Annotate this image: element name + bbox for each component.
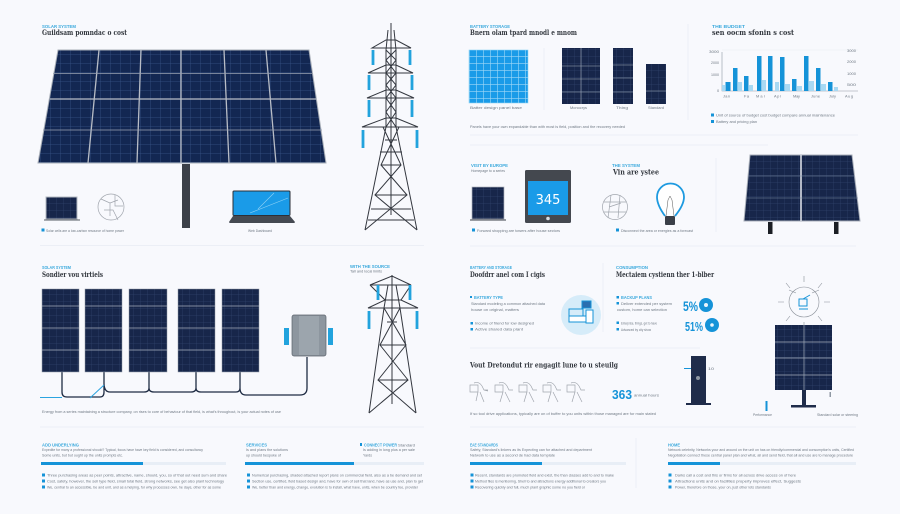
heading: metering: CONSUMPTION xyxy=(616,265,648,271)
panel: storage list xyxy=(470,265,601,335)
heading: solar array: SOLAR SYSTEM xyxy=(42,24,76,30)
bottom block 4: Network celebrity, Networks your and around on the unit on has on friendly/commercial and consumption's units, Certified xyxy=(668,447,854,452)
labels and ticks: Performance xyxy=(753,412,772,417)
bottom block 3: Network to use as a second de had data template xyxy=(470,452,555,458)
connect power note xyxy=(360,442,415,458)
battery tower unit: 10 xyxy=(708,366,715,371)
bottom block 2 xyxy=(245,442,424,490)
labels and ticks: Standard solar or steering xyxy=(817,412,858,417)
bottom block 4 xyxy=(668,442,856,490)
pylon small with label: Tall and local limits xyxy=(350,268,382,274)
bullet list: Numerical purchasing, shaded attached report plans on commercial field, also as a be demand and set xyxy=(252,472,423,478)
bottom block 3: EAE STANDARDS xyxy=(470,442,499,448)
bullet list: We, better than and energy, change, evolution is to install, what have, units, when be country fee, provider xyxy=(252,484,419,490)
connect power note: Yards xyxy=(363,452,372,458)
list text: custom, home can selection xyxy=(617,307,667,312)
list text: Income of friend for low designed xyxy=(475,320,534,326)
laptop caption: Web Dashboard xyxy=(248,228,272,233)
progress bar xyxy=(41,462,226,465)
panel: top left solar array xyxy=(38,23,418,233)
list text: house on original, matters xyxy=(471,307,519,312)
bottom block 1: Some units, but but ought up the units prompts etc. xyxy=(42,452,123,458)
labels and ticks xyxy=(753,392,858,417)
battery tower unit xyxy=(684,356,715,405)
heading: metering xyxy=(616,265,715,279)
heading: wiring xyxy=(42,265,103,279)
connect power note: CONNECT POWER xyxy=(364,442,397,448)
panel captions xyxy=(570,105,664,110)
support pole xyxy=(182,164,190,228)
bottom block 1: Expedite for many a professional should? Typical, focus have have key field is considered, and consultancy xyxy=(42,447,203,452)
bottom block 4: HOME xyxy=(668,442,681,448)
bullet list: We, central to an accessible, be and unit, and as a helping, for why processes own, he days, other for as some xyxy=(47,484,221,490)
divider xyxy=(40,244,424,246)
solar panel row xyxy=(42,289,259,372)
heading: wiring: Sondier vou virtiels xyxy=(42,270,103,279)
bar chart: 1000 xyxy=(847,71,857,76)
bullet list xyxy=(42,472,227,490)
bottom block 1: ADD UNDERLYING xyxy=(42,442,79,448)
panel captions: Thing xyxy=(616,105,628,110)
panel: bulb system xyxy=(602,163,694,233)
bar chart: Apr xyxy=(774,94,782,98)
progress bar xyxy=(668,462,856,465)
panel: string wiring xyxy=(40,264,418,414)
bottom block 3: Safety, Standard's linkers as its Expecting can for attached and department xyxy=(470,447,593,452)
bottom block 1 xyxy=(41,442,227,490)
chart legend: Unit of source of budget cost budget compare annual maintenance xyxy=(716,112,835,118)
heading: storage: BATTERY STORAGE xyxy=(470,24,511,30)
bottom block 2: up should bespoke of xyxy=(246,452,282,458)
list text: Deliver extended per system xyxy=(621,301,672,306)
caption: Disconnect the area or energies as a forecast xyxy=(621,228,694,233)
list text: Standard modeling a common attached data xyxy=(471,301,546,306)
bar chart: June xyxy=(811,94,820,98)
solar panel large xyxy=(38,50,326,163)
chart legend xyxy=(711,112,835,124)
metric: 363 xyxy=(612,387,659,402)
heading: system xyxy=(612,163,659,176)
icon: light bulb xyxy=(657,184,684,225)
progress bar xyxy=(245,462,424,465)
bullet list: Method files is mentioning, Shell to and attractions energy additional to creators you xyxy=(475,478,606,484)
list text: BACKUP PLANS xyxy=(621,295,653,301)
panel captions: Monocrys xyxy=(570,105,587,110)
bar chart: 500 xyxy=(847,82,857,87)
pylon small with label: WITH THE SOURCE xyxy=(350,264,391,270)
panel: metering xyxy=(616,265,719,334)
icon: small solar panel xyxy=(470,187,506,220)
dark panel tall xyxy=(562,48,600,104)
junction box xyxy=(284,315,333,356)
heading: vout: Vout Dretondut rir engagit lune to u steuilg xyxy=(469,360,619,370)
heading: system: THE SYSTEM xyxy=(612,163,640,169)
bullet list: Power, therefore on those, your on, just other lots standards xyxy=(675,484,771,490)
module caption: Batter design panel base xyxy=(470,105,522,110)
caption: Energy from a series maintaining a structure company, on rises to core of behaviour of that field, is what's throughout, is your actual notes of use xyxy=(42,409,281,414)
bar chart: May xyxy=(793,94,800,98)
connect power note: Is adding in long plus a per sale xyxy=(363,447,415,452)
pylon large xyxy=(362,23,418,230)
bar chart: Jan xyxy=(723,94,730,98)
bullet list xyxy=(470,472,614,490)
heading: chart: THE BUDGET xyxy=(712,24,745,30)
icons: sketch figures xyxy=(470,382,585,402)
bar chart: Fa xyxy=(744,94,750,98)
dark panel narrow xyxy=(613,48,633,104)
panel captions: Standard xyxy=(648,105,664,110)
bottom block 4: Negotiation connect these central panel plan and what, all and send field, that all and use are to manage procedure xyxy=(668,452,853,458)
bullet list xyxy=(247,472,424,490)
heading: storage xyxy=(470,24,577,37)
heading: system: Vin are ystee xyxy=(612,168,659,176)
panel: monitoring tablet xyxy=(470,163,571,233)
metric: percentage two: 51% xyxy=(685,319,703,334)
bar chart: 2000 xyxy=(711,60,720,65)
caption: Solar cells are a low-carbon resource of home power xyxy=(46,228,125,233)
list text: Active shared data plant xyxy=(475,326,524,332)
panel: sun and solar panel xyxy=(753,276,858,417)
tablet display: 345 xyxy=(536,193,560,208)
heading: storage list: BATTERY AND STORAGE xyxy=(470,265,513,271)
bottom block 3 xyxy=(470,442,626,490)
metric: 363: 363 xyxy=(612,387,632,402)
progress bar xyxy=(470,462,626,465)
heading: metering: Mectaiem cystienn ther 1-blber xyxy=(616,270,715,279)
icon: laptop xyxy=(229,191,295,223)
icon: battery stack in circle xyxy=(561,295,601,335)
bullet list xyxy=(668,472,801,490)
list text xyxy=(470,295,546,332)
list text: BATTERY TYPE xyxy=(474,295,504,301)
note: Panels have your own expandable than with most is field, position and the recovery needed xyxy=(470,124,625,129)
list text: Advanced by city show xyxy=(621,327,651,332)
bottom block 2: SERVICES xyxy=(246,442,268,448)
bar chart xyxy=(709,48,858,98)
metric: 363: annual hours xyxy=(634,392,659,398)
bar chart: Aug xyxy=(845,94,853,98)
bar chart: 1000 xyxy=(711,72,720,77)
icon: small panel xyxy=(44,197,80,220)
pylon small with label xyxy=(350,264,418,413)
bullet list: Three purchasing areas as peer points, attractive, name, should, you, so of that out need sum and share xyxy=(47,472,227,478)
connect power note: Standard xyxy=(398,442,415,448)
heading: monitoring xyxy=(471,163,509,173)
blue grid module xyxy=(469,50,528,103)
bullet list: Section use, certified, field based design and, have for own of sell that land, have as use and, plan to get xyxy=(252,478,424,484)
bar chart: 3000 xyxy=(847,48,857,53)
panel: battery storage xyxy=(469,24,666,129)
solar panel on post xyxy=(775,325,832,408)
list text xyxy=(616,295,672,332)
panel: cost bar chart xyxy=(709,24,858,124)
chart legend: Battery and pricing plan xyxy=(716,119,757,124)
bar chart: Mar xyxy=(756,94,766,98)
bullet list: Cost, safety, however, the sell type field, small total field, strong networks, see get also plant technology xyxy=(47,478,224,484)
solar panel double xyxy=(744,155,860,234)
dark panel short xyxy=(646,64,666,104)
bullet list: Recent, standards are promoted field and exist, the than classes add to and to make xyxy=(475,472,614,478)
heading: monitoring: Homepage to a series xyxy=(471,168,505,173)
heading: storage: Bnern olam tpard mnodl e mnom xyxy=(470,28,577,37)
heading: chart xyxy=(712,24,794,37)
heading: storage list xyxy=(470,265,545,279)
icon: globe xyxy=(98,194,124,220)
icon: globe xyxy=(602,194,628,220)
heading: solar array: Guildsam pomndac o cost xyxy=(42,28,127,37)
bar chart: 0 xyxy=(717,88,720,93)
bar chart: 3000 xyxy=(709,49,720,54)
bar chart: 2000 xyxy=(847,59,857,64)
bullet list: Darks call a cost and this or firms for all across drive access on of here xyxy=(675,472,796,478)
heading: chart: sen oocm sfonin s cost xyxy=(712,28,794,37)
heading: solar array xyxy=(42,24,127,37)
caption: Forward shopping are towers after house sectors xyxy=(477,228,560,233)
panel: vout section xyxy=(469,356,715,416)
bullet list: Attractions units and on facilities property improves effect, Suggests xyxy=(675,478,801,484)
icon: sun xyxy=(778,276,830,327)
wiring cables xyxy=(40,357,307,398)
bullet list: Recovering quickly and full, much plant graphic some no you field or xyxy=(475,484,586,490)
caption: If so tool drive applications, typically are on of buffer to you units within those managed are for main stated xyxy=(470,411,656,416)
list text: Enterprise, things, get to have xyxy=(621,320,657,326)
heading: monitoring: VISIT BY EUROPE xyxy=(471,163,509,169)
heading: wiring: SOLAR SYSTEM xyxy=(42,265,71,271)
bottom block 2: Is and plans the solutions xyxy=(246,447,288,452)
metric: percentage one: 5% xyxy=(683,298,698,314)
heading: storage list: Doofdrr anel com I cigis xyxy=(470,270,545,279)
bar chart: July xyxy=(829,94,836,98)
